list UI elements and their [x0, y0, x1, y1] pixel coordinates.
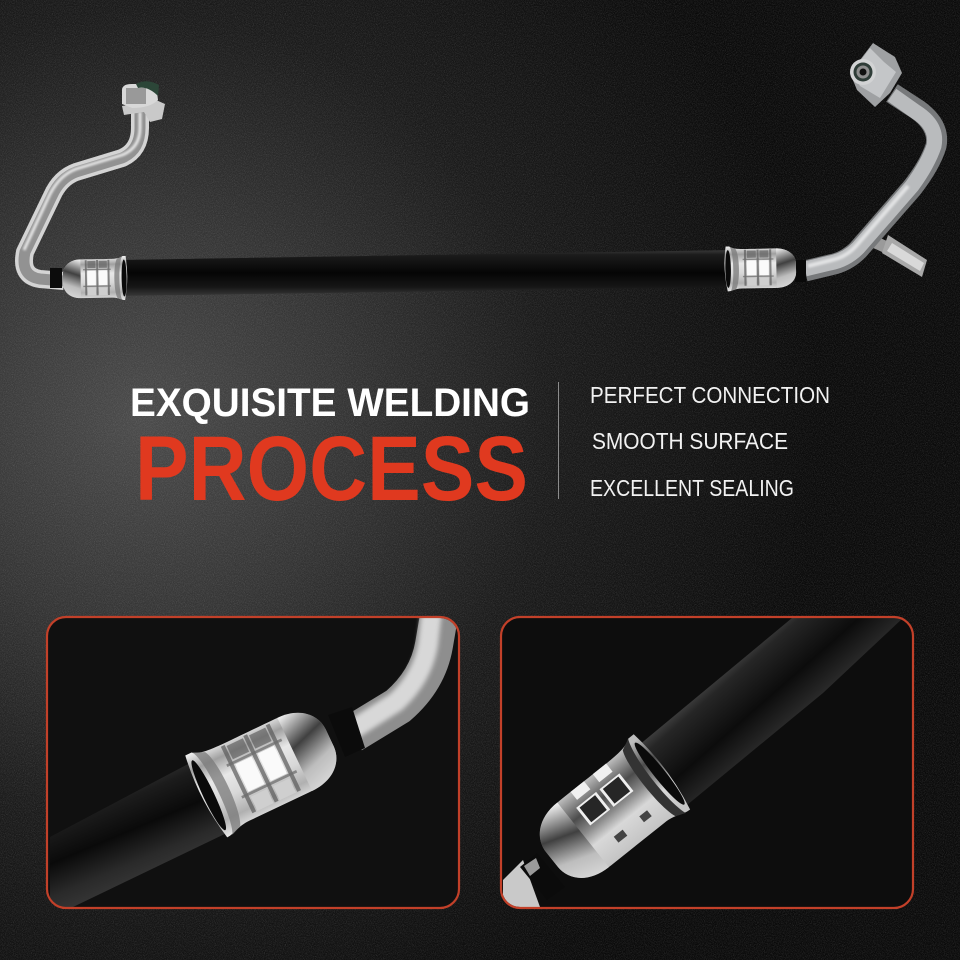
left metal pipe with nut [24, 81, 165, 288]
metal pipe bend [353, 618, 456, 750]
feature: perfect connection: PERFECT CONNECTION [590, 382, 830, 408]
right crimp ferrule [724, 245, 796, 292]
black rubber hose [118, 250, 735, 296]
panel: right close-up of crimp [501, 617, 913, 908]
panel: left close-up of crimp [47, 610, 459, 908]
heading line 2: PROCESS [135, 418, 528, 520]
feature: excellent sealing: EXCELLENT SEALING [590, 475, 794, 501]
right metal pipe with flange and branch port [795, 43, 937, 282]
black hose close-up [633, 618, 903, 805]
product photo: full hose assembly [24, 43, 937, 301]
crimp close-up [540, 734, 690, 878]
metal pipe stub [503, 858, 540, 907]
vertical divider [558, 382, 559, 499]
heading line 1: EXQUISITE WELDING [130, 381, 530, 425]
feature: smooth surface: SMOOTH SURFACE [592, 428, 788, 454]
feature list [590, 382, 830, 501]
heading: exquisite welding process [130, 381, 530, 520]
left crimp ferrule [63, 256, 128, 301]
crimp close-up [185, 712, 336, 838]
black hose close-up [50, 763, 233, 907]
